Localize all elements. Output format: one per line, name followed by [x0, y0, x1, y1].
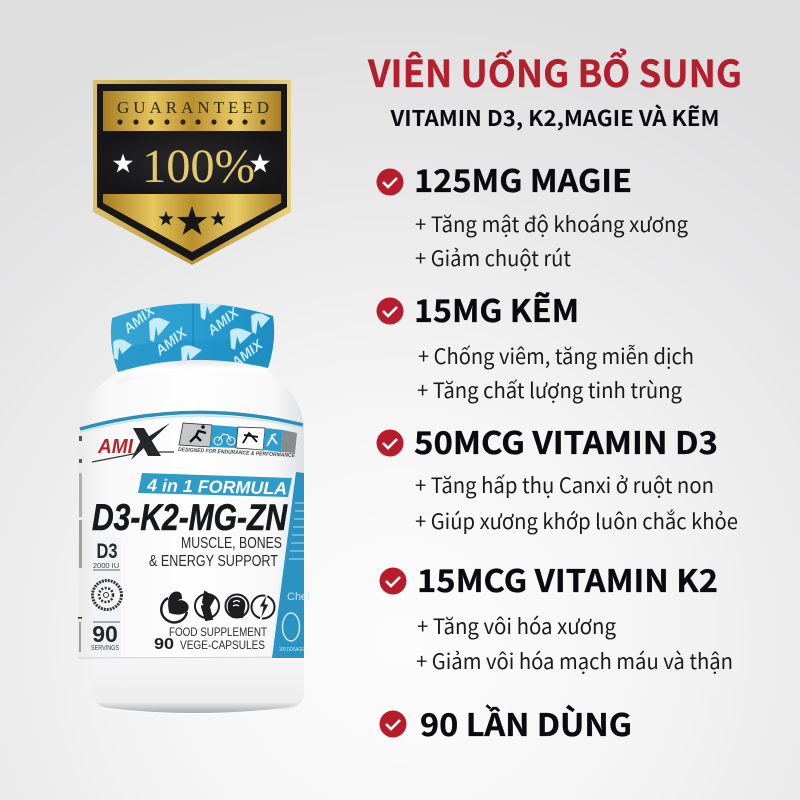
AMIX logo — [92, 423, 174, 462]
benefits — [415, 470, 738, 536]
section: magie — [376, 156, 688, 273]
cap logo pattern: AMIX — [151, 323, 191, 359]
bottle body — [78, 368, 304, 714]
benefits — [416, 611, 733, 676]
D3 column: 2000 IU — [93, 561, 119, 570]
title: VIÊN UỐNG BỔ SUNG — [367, 44, 742, 98]
section: vitamin k2 — [380, 556, 733, 676]
benefits — [415, 209, 688, 273]
product bottle — [78, 295, 310, 714]
benefits: + Tăng chất lượng tinh trùng — [417, 375, 682, 405]
benefits: + Chống viêm, tăng miễn dịch — [418, 341, 694, 371]
benefits: + Giảm vôi hóa mạch máu và thận — [416, 646, 733, 676]
benefits: + Tăng mật độ khoáng xương — [415, 209, 688, 239]
bottle base — [91, 657, 304, 713]
section: servings — [380, 700, 632, 745]
badge dots — [117, 119, 266, 125]
section: vitamin d3 — [376, 418, 738, 536]
D3 column: D3 — [96, 540, 118, 563]
icon: check — [380, 568, 406, 594]
bottle neck — [118, 359, 268, 384]
label top band — [80, 412, 303, 429]
supplement text: 90 — [154, 636, 174, 653]
bottle cap — [110, 304, 274, 372]
blue side panel: 100 DOSAGE — [279, 647, 304, 653]
strip caption: DESIGNED FOR ENDURANCE & PERFORMANCE — [178, 447, 295, 459]
benefits: + Tăng vôi hóa xương — [417, 611, 616, 641]
heading: 50MCG VITAMIN D3 — [414, 418, 718, 463]
benefit icons — [161, 592, 274, 622]
product name: D3-K2-MG-ZN — [92, 497, 288, 538]
supplement text: FOOD SUPPLEMENT — [169, 625, 268, 639]
supplement text: VEGE-CAPSULES — [180, 638, 265, 652]
AMIX logo: AMI — [97, 436, 133, 458]
badge percentage: 100% — [142, 140, 255, 193]
badge dark stars — [158, 206, 226, 235]
section: kem — [376, 286, 694, 405]
benefits: + Giúp xương khớp luôn chắc khỏe — [415, 506, 738, 536]
badge white stars — [113, 154, 270, 172]
D3 column: 90 — [92, 621, 118, 647]
benefits: + Giảm chuột rút — [415, 243, 571, 273]
sport icons strip — [178, 423, 297, 459]
heading: 90 LẦN DÙNG — [420, 700, 632, 745]
icon: check — [380, 710, 406, 738]
benefits — [417, 341, 694, 405]
D3 column — [91, 537, 122, 657]
product subtitle: & ENERGY SUPPORT — [149, 553, 278, 570]
icon: check — [376, 430, 404, 456]
supplement text — [154, 625, 268, 653]
benefits: + Tăng hấp thụ Canxi ở ruột non — [415, 470, 714, 500]
product subtitle — [149, 535, 282, 570]
subtitle: VITAMIN D3, K2,MAGIE VÀ KẼM — [389, 102, 720, 133]
cap logo pattern — [126, 307, 263, 363]
icon: check — [376, 168, 404, 196]
seal icon — [92, 580, 122, 610]
heading: 15MG KẼM — [414, 286, 579, 331]
icon: check — [376, 298, 404, 324]
D3 column: SERVINGS — [91, 645, 119, 652]
badge: guaranteed 100% — [93, 80, 291, 265]
heading: 125MG MAGIE — [414, 156, 632, 201]
blue side panel: Chel — [287, 591, 310, 603]
cap logo pattern: AMIX — [119, 301, 159, 337]
heading: 15MCG VITAMIN K2 — [417, 556, 718, 601]
badge word: GUARANTEED — [117, 98, 269, 117]
cap logo pattern: AMIX — [227, 335, 267, 371]
cap logo pattern: AMIX — [203, 303, 243, 339]
left edge microtext — [78, 436, 82, 652]
blue side panel — [270, 472, 310, 658]
formula ribbon: 4 in 1 FORMULA — [146, 475, 287, 498]
product subtitle: MUSCLE, BONES — [181, 535, 282, 552]
